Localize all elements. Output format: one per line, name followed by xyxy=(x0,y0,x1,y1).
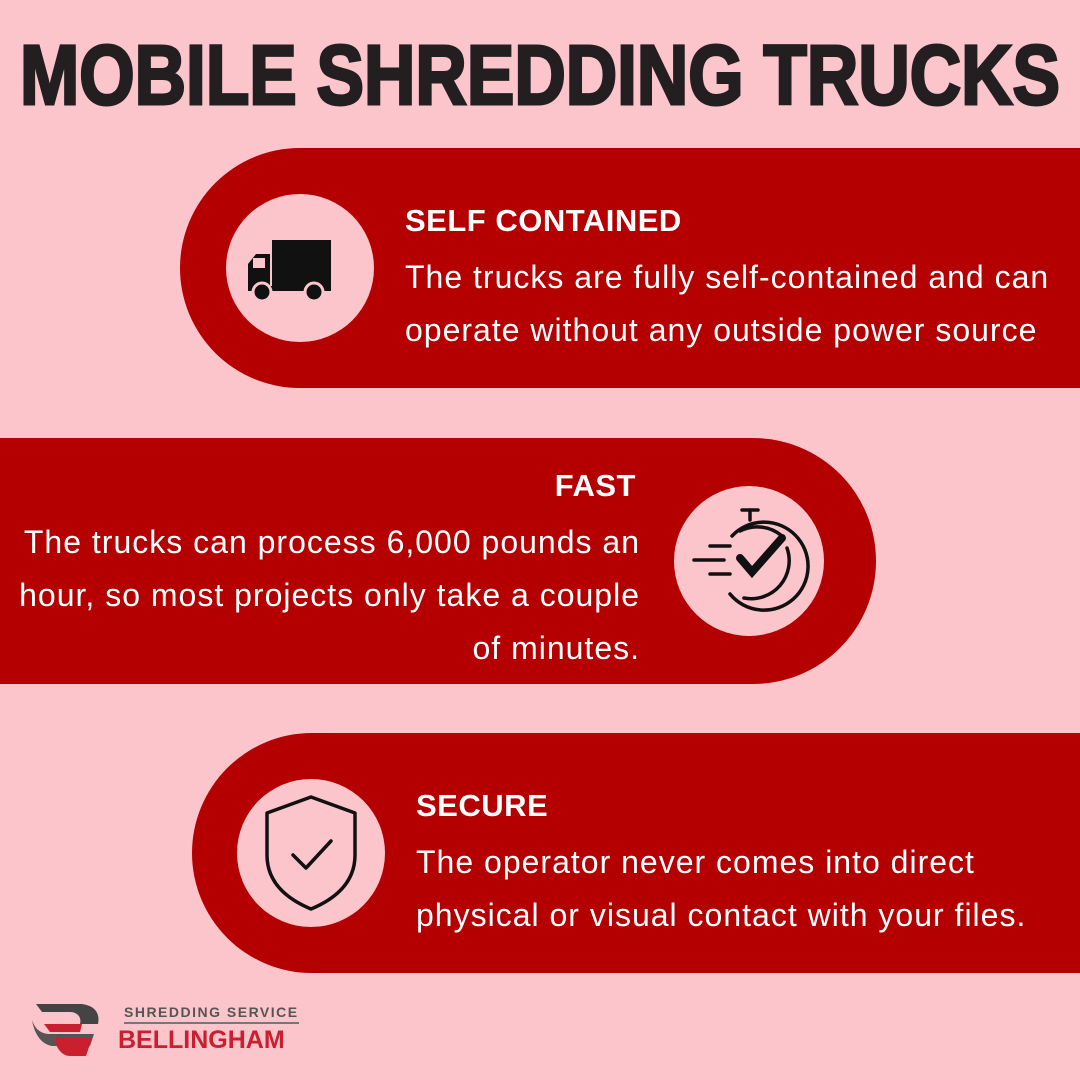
icon: truck xyxy=(226,194,374,342)
panel: secure xyxy=(192,733,1080,973)
text: self contained: The trucks are fully self-contained and can xyxy=(405,259,1049,295)
text: fast: The trucks can process 6,000 pounds an xyxy=(24,524,640,560)
logo: BELLINGHAM xyxy=(118,1026,285,1054)
heading: self contained: SELF CONTAINED xyxy=(405,203,682,238)
panel: self contained xyxy=(180,148,1080,388)
icon: stopwatch xyxy=(674,486,824,636)
icon: shield xyxy=(237,779,385,927)
heading: secure: SECURE xyxy=(416,788,548,823)
text: self contained xyxy=(405,259,1049,348)
panel: fast xyxy=(0,438,876,684)
text: fast: hour, so most projects only take a couple xyxy=(19,577,640,613)
logo xyxy=(32,1004,299,1056)
text: secure: physical or visual contact with your files. xyxy=(416,897,1026,933)
text: self contained: operate without any outside power source xyxy=(405,312,1037,348)
heading: fast: FAST xyxy=(555,468,636,503)
text: fast: of minutes. xyxy=(472,630,640,666)
logo: SHREDDING SERVICE xyxy=(124,1004,299,1020)
text: fast xyxy=(19,524,640,666)
text: secure: The operator never comes into direct xyxy=(416,844,975,880)
text: secure xyxy=(416,844,1026,933)
